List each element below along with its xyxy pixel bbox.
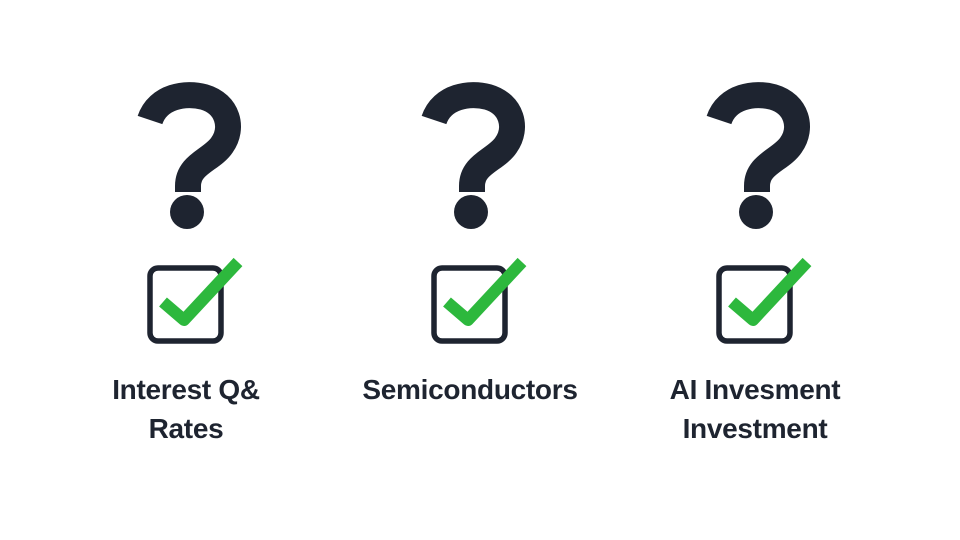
- icon: question mark: [422, 82, 526, 344]
- column: AI investment: [670, 82, 840, 444]
- column: semiconductors: [362, 82, 578, 405]
- icon: question mark: [706, 82, 812, 344]
- column: interest rates: [112, 82, 260, 444]
- label: [112, 374, 260, 444]
- label: Rates: [149, 413, 223, 444]
- icon: question mark: [138, 82, 242, 344]
- label: Semiconductors: [362, 374, 578, 405]
- label: [670, 374, 840, 444]
- label: Investment: [683, 413, 827, 444]
- label: Interest Q&: [112, 374, 260, 405]
- label: AI Invesment: [670, 374, 840, 405]
